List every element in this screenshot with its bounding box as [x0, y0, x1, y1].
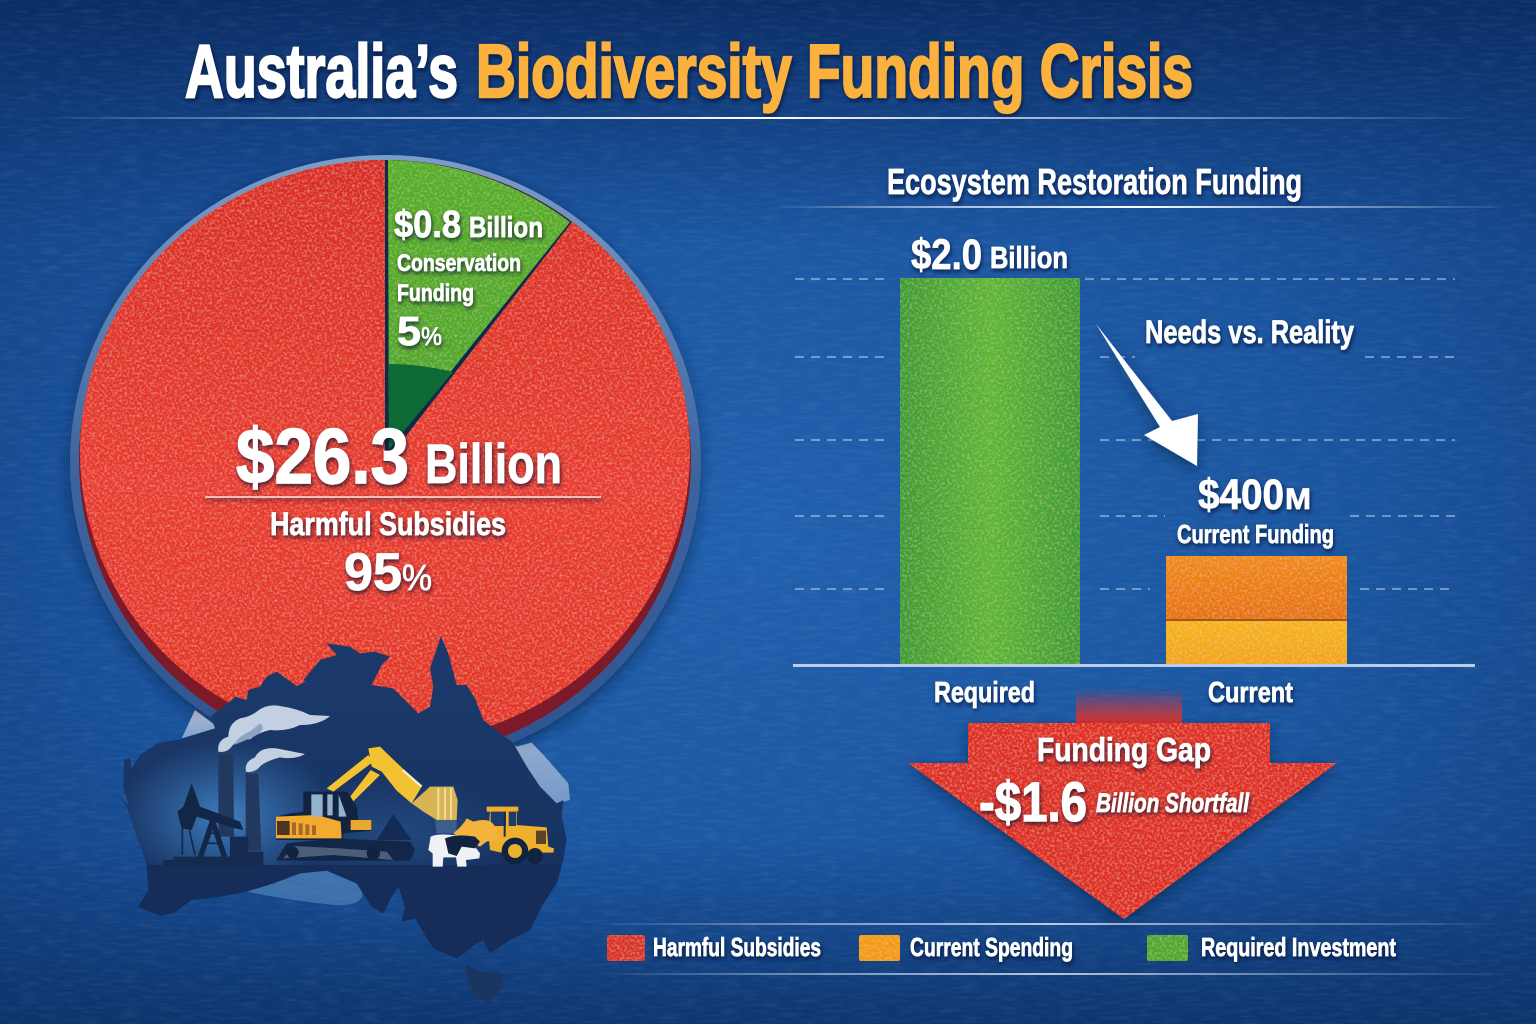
- icon: Australia map with industry scene: [117, 636, 587, 1003]
- label: conservation funding: Conservation: [397, 250, 521, 277]
- value label: required: [911, 231, 1068, 279]
- mist around coast: [182, 710, 570, 905]
- title: Australia’s: [185, 29, 458, 113]
- bar: required: [900, 278, 1080, 665]
- title: [185, 29, 1193, 113]
- label: harmful subsidies: Billion: [425, 432, 562, 495]
- callout: funding gap arrow: [908, 688, 1337, 919]
- Tasmania: [465, 963, 505, 1003]
- label: conservation funding: $0.8: [394, 204, 461, 246]
- legend item: current spending: Current Spending: [910, 932, 1073, 962]
- label: conservation funding: Funding: [397, 280, 474, 307]
- ground light: [407, 864, 553, 872]
- label: harmful subsidies: 95: [344, 543, 402, 602]
- label: harmful subsidies: $26.3: [236, 412, 409, 500]
- title: Biodiversity Funding Crisis: [476, 29, 1193, 113]
- axis labels: Current: [1208, 677, 1293, 709]
- oil pump: [147, 783, 263, 866]
- pie slice: conservation funding: [385, 160, 572, 463]
- chimneys: [218, 754, 261, 851]
- label: harmful subsidies: Harmful Subsidies: [270, 506, 506, 542]
- value label: required: Billion: [990, 240, 1068, 275]
- map silhouette: [118, 636, 567, 958]
- value label: current: [1177, 471, 1334, 549]
- value label: required: $2.0: [911, 231, 982, 279]
- callout: funding gap arrow: Billion Shortfall: [1096, 788, 1249, 818]
- legend: [590, 923, 1510, 975]
- legend item: required investment: Required Investment: [1201, 932, 1396, 962]
- pie depth shadow: [79, 160, 691, 760]
- label: conservation funding: %: [421, 323, 442, 351]
- legend item: harmful subsidies: [607, 932, 821, 962]
- axis labels: Required: [934, 677, 1035, 709]
- pie slice: harmful subsidies: [80, 160, 690, 744]
- callout: funding gap arrow: Funding Gap: [1037, 731, 1211, 768]
- label: harmful subsidies: [205, 412, 601, 602]
- callout: needs vs reality: Needs vs. Reality: [1145, 314, 1354, 350]
- label: harmful subsidies: %: [402, 557, 432, 598]
- value label: current: $400: [1198, 471, 1284, 519]
- legend item: required investment: [1147, 932, 1396, 962]
- bar: current: [1166, 556, 1347, 665]
- cow: [428, 818, 500, 867]
- scene glow: [128, 748, 562, 958]
- excavator: [276, 747, 458, 861]
- label: conservation funding: Billion: [469, 212, 543, 244]
- chart heading: Ecosystem Restoration Funding: [887, 161, 1302, 202]
- callout: funding gap arrow: -$1.6: [979, 770, 1087, 833]
- tractor: [487, 807, 554, 864]
- label: conservation funding: 5: [397, 308, 421, 354]
- panel: ecosystem restoration funding chart: [770, 161, 1510, 709]
- pie outer ring: [70, 155, 701, 769]
- value label: current: Current Funding: [1177, 519, 1334, 549]
- legend item: harmful subsidies: Harmful Subsidies: [653, 932, 821, 962]
- axis labels: [934, 677, 1293, 709]
- legend item: current spending: [859, 932, 1073, 962]
- panel: pie chart: [70, 155, 701, 769]
- value label: current: M: [1285, 483, 1311, 516]
- arrow: needs to reality: [1096, 324, 1198, 466]
- label: conservation funding: [394, 204, 543, 354]
- smoke plumes: [218, 705, 330, 772]
